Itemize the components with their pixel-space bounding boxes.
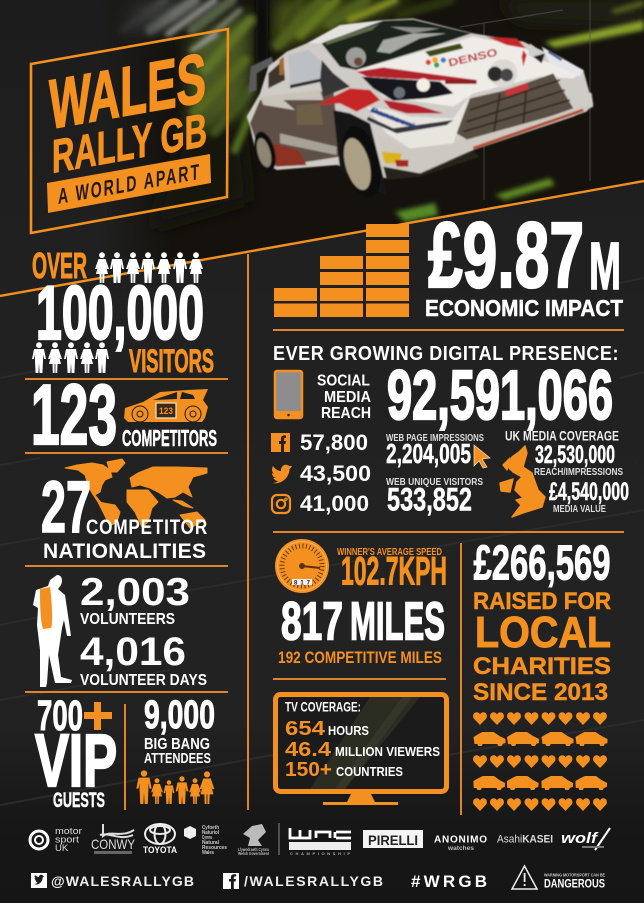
decorative background streaks xyxy=(0,278,644,805)
label: visitors: VISITORS xyxy=(129,343,214,379)
label: VIP: VIP xyxy=(35,719,117,802)
stat: over 100,000 visitors xyxy=(32,245,214,379)
label: social media reach: REACH xyxy=(321,405,371,422)
label: media value: MEDIA VALUE xyxy=(553,504,606,515)
icon: twitter xyxy=(272,465,292,483)
logo: Conwy: CONWY xyxy=(91,836,136,852)
text: facebook handle: /WALESRALLYGB xyxy=(244,873,383,889)
banner text: A WORLD APART xyxy=(58,159,201,209)
label: viewers: MILLION VIEWERS xyxy=(335,744,440,759)
heading: Rally GB: RALLY GB xyxy=(52,104,207,184)
label: local: LOCAL xyxy=(475,608,611,657)
icon row: family xyxy=(136,770,214,804)
logo: WRC: CHAMPIONSHIP xyxy=(290,851,350,856)
number: 100,000: 100,000 xyxy=(36,271,204,356)
label: guests: GUESTS xyxy=(53,789,105,812)
logo: Anonimo xyxy=(434,834,487,852)
number: 2,003: 2,003 xyxy=(80,571,190,614)
icon row: people xyxy=(32,342,109,373)
logo: Welsh Government: Welsh Government xyxy=(238,851,269,856)
panel: distance and speed xyxy=(275,539,447,667)
bar chart icon xyxy=(274,224,409,317)
text: warning: WARNING MOTORSPORT CAN BE xyxy=(544,872,605,878)
label: reach: REACH/IMPRESSIONS xyxy=(534,467,623,478)
label: web unique visitors: WEB UNIQUE VISITORS xyxy=(386,477,483,488)
number: facebook: 57,800 xyxy=(300,430,368,455)
number: 123: 123 xyxy=(31,368,117,463)
icon: cursor xyxy=(474,445,490,468)
stat: 700+ VIP guests xyxy=(35,692,117,812)
number: 4,016: 4,016 xyxy=(80,630,186,674)
icon: rally car xyxy=(124,389,208,422)
logo: Conwy xyxy=(91,824,136,854)
logo: Toyota: TOYOTA xyxy=(143,845,177,856)
social links xyxy=(31,866,605,891)
number: 700: 700 xyxy=(37,692,83,740)
logo: motorsport UK: UK xyxy=(55,843,69,854)
label: web page impressions: WEB PAGE IMPRESSIONS xyxy=(386,433,484,444)
car: Panasonic xyxy=(370,105,422,133)
logo: Anonimo: ANONIMO xyxy=(434,834,487,846)
logo: Wolf: wolf xyxy=(561,830,599,847)
logo: Natural Resources Wales: Natural xyxy=(202,840,220,846)
stat: volunteers xyxy=(33,571,207,689)
logo: Wolf xyxy=(561,828,610,850)
number: web unique visitors: 533,852 xyxy=(387,482,472,518)
label: charities: CHARITIES xyxy=(473,653,611,680)
logo: motorsport UK: sport xyxy=(55,834,79,846)
text: warning: DANGEROUS xyxy=(544,876,605,890)
label: winner's average speed: WINNER'S AVERAGE SPEED xyxy=(337,547,442,558)
number: countries: 150+ xyxy=(285,759,332,781)
panel: charity xyxy=(472,536,611,811)
label: social media reach: MEDIA xyxy=(324,389,371,406)
label: big bang: BIG BANG xyxy=(144,736,210,753)
icon: facebook square xyxy=(223,873,239,889)
logo: Natural Resources Wales: Resources xyxy=(202,845,227,851)
text: warning xyxy=(544,872,605,890)
label: competitive miles: 192 COMPETITIVE MILES xyxy=(278,648,442,667)
label: competitor: COMPETITOR xyxy=(86,516,208,539)
label: since 2013: SINCE 2013 xyxy=(473,679,608,706)
car: DENSO xyxy=(447,47,499,70)
label: competitors: COMPETITORS xyxy=(122,425,217,451)
icon: speedometer: 817 xyxy=(294,580,311,586)
icon rows: hearts and cars xyxy=(472,712,608,811)
logo: Natural Resources Wales: Cyfoeth xyxy=(202,825,219,831)
panel: TV coverage xyxy=(276,694,446,805)
banner: A World Apart xyxy=(47,154,211,213)
text: hashtag: #WRGB xyxy=(411,872,487,891)
panel: economic impact xyxy=(274,203,623,321)
label: TV coverage: TV COVERAGE: xyxy=(285,700,361,714)
label: social media reach xyxy=(317,372,371,422)
label: miles: MILES xyxy=(350,592,445,652)
panel: digital presence xyxy=(271,342,629,518)
icon: plus xyxy=(84,702,112,730)
number: instagram: 41,000 xyxy=(300,491,369,516)
stat: big bang attendees xyxy=(136,693,215,804)
orange diagonal divider xyxy=(0,181,644,296)
logo divider xyxy=(278,823,280,855)
car xyxy=(247,18,593,201)
label: nationalities: NATIONALITIES xyxy=(43,540,206,563)
unit: M: M xyxy=(589,229,621,304)
logo: Asahi Kasei: AsahiKASEI xyxy=(497,834,553,846)
number: web page impressions: 2,204,005 xyxy=(386,438,471,469)
logo: motorsport UK xyxy=(30,826,82,854)
icon: world map xyxy=(65,459,207,528)
number: speed: 102.7KPH xyxy=(341,550,447,594)
logo: Pirelli: PIRELLI xyxy=(368,832,418,848)
label: volunteer days: VOLUNTEER DAYS xyxy=(80,672,207,689)
sponsor logos xyxy=(30,823,610,856)
label: attendees: ATTENDEES xyxy=(144,750,211,767)
icon: instagram xyxy=(272,495,290,513)
icon: rally car: 123 xyxy=(159,406,173,416)
label: hours: HOURS xyxy=(328,723,369,738)
logo: Natural Resources Wales xyxy=(184,825,227,856)
icon: phone xyxy=(275,371,302,418)
icon: twitter square xyxy=(31,873,47,888)
text: twitter handle: @WALESRALLYGB xyxy=(51,873,194,889)
number: twitter: 43,500 xyxy=(300,461,371,486)
label: social media reach: SOCIAL xyxy=(317,372,370,390)
icon: warning triangle xyxy=(512,866,537,889)
number: viewers: 46.4 xyxy=(285,739,332,761)
title frame xyxy=(31,29,228,233)
logo: Welsh Government: Llywodraeth Cymru xyxy=(238,847,269,852)
logo: WRC xyxy=(289,828,351,856)
logo: Anonimo: watches xyxy=(447,845,474,852)
icon: facebook xyxy=(271,433,290,452)
heading: Wales: WALES xyxy=(49,38,206,144)
icon: UK map xyxy=(500,446,545,517)
stat: 27 nationalities xyxy=(41,459,208,563)
number: 9,000: 9,000 xyxy=(144,693,215,737)
logo: Natural Resources Wales: Cymru xyxy=(202,835,212,841)
icon: speedometer xyxy=(275,539,329,593)
panel: rally car photograph xyxy=(120,0,644,270)
column divider xyxy=(247,254,249,810)
label: over: OVER xyxy=(32,245,87,286)
logo: Welsh Government xyxy=(238,824,269,856)
logo: Toyota xyxy=(143,824,177,856)
stat: 123 competitors xyxy=(31,368,217,463)
number: hours: 654 xyxy=(285,718,326,740)
title block xyxy=(31,29,228,233)
label: economic impact: ECONOMIC IMPACT xyxy=(425,295,623,321)
logo: Natural Resources Wales: Wales xyxy=(202,850,214,856)
icon row: people xyxy=(95,252,203,283)
icon: television xyxy=(276,694,446,805)
number: 27: 27 xyxy=(41,467,91,548)
label: raised for: RAISED FOR xyxy=(473,588,611,615)
label: countries: COUNTRIES xyxy=(336,764,403,779)
icon: volunteer figure xyxy=(33,575,72,687)
logo: motorsport UK: motor xyxy=(55,826,82,837)
label: volunteers: VOLUNTEERS xyxy=(80,611,175,628)
logo: Natural Resources Wales: Naturiol xyxy=(202,830,220,836)
number: 817: 817 xyxy=(281,592,343,652)
